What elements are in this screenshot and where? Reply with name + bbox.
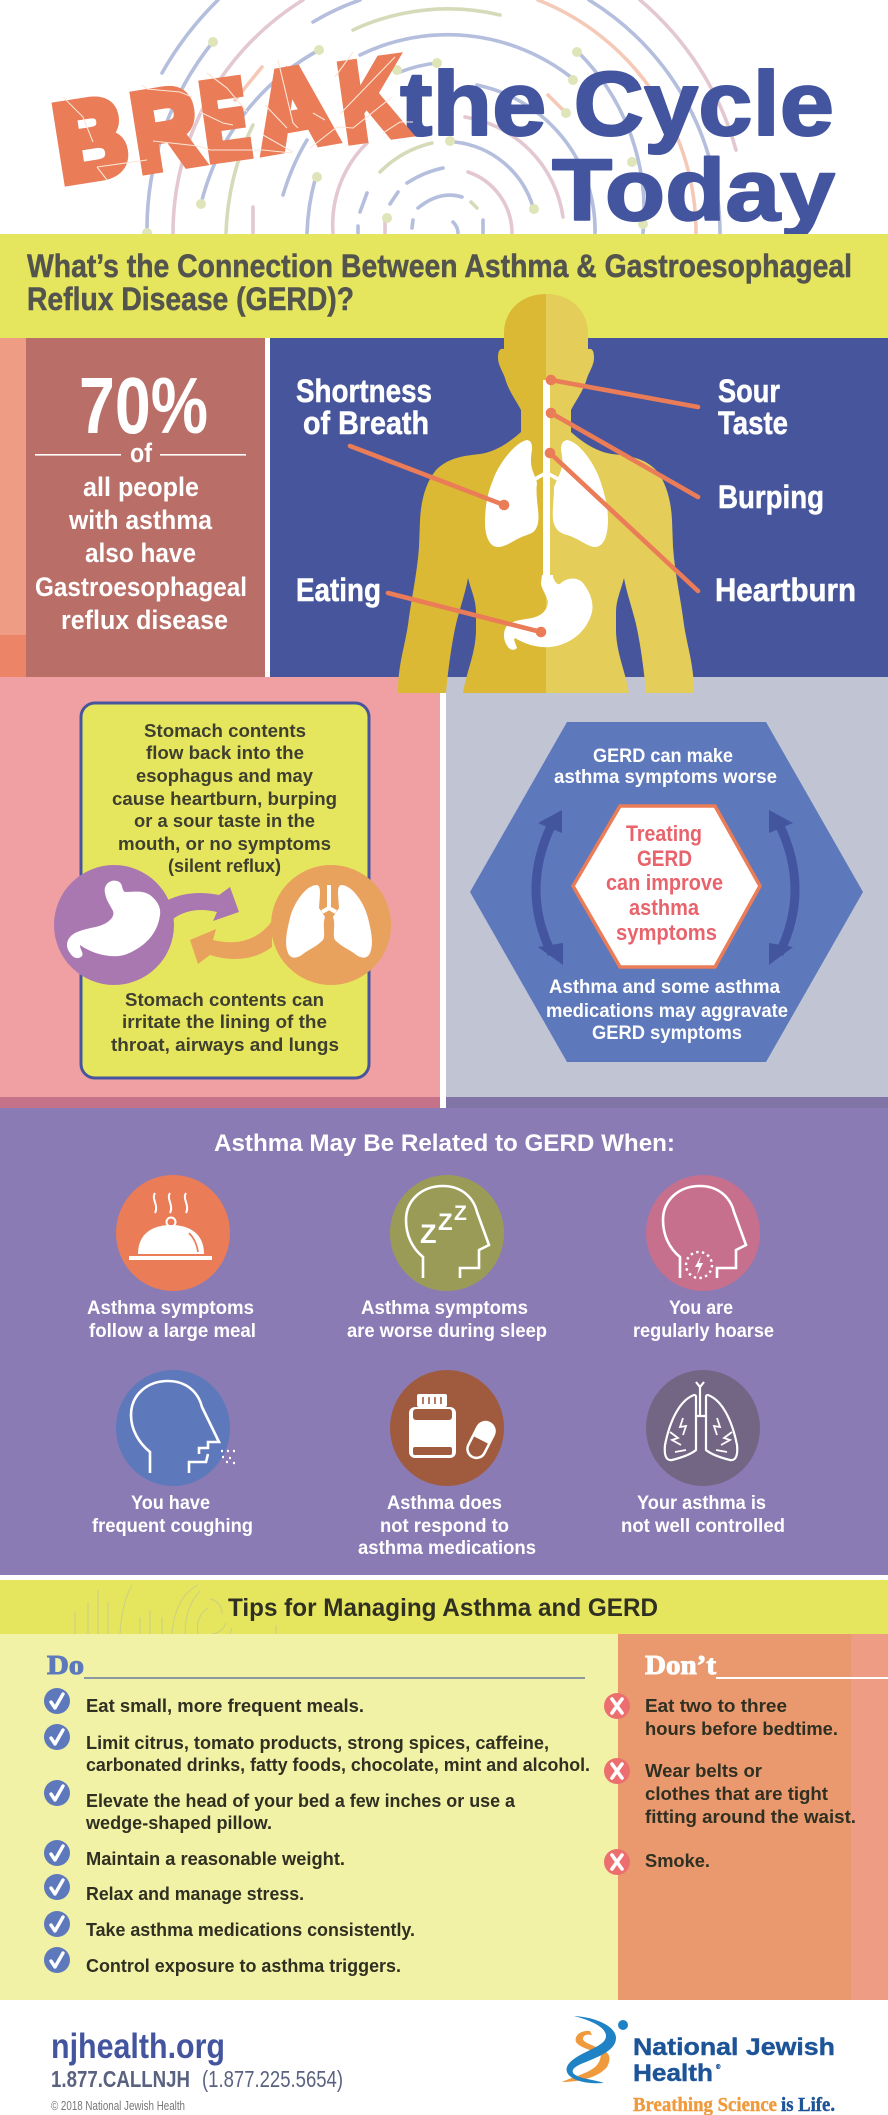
don't list text: Eat two to three bbox=[645, 1696, 787, 1716]
symptom labels: Sour bbox=[718, 373, 780, 409]
title: cracked word BREAK: K bbox=[332, 35, 411, 165]
text: GERD can make worse bbox=[554, 746, 777, 788]
panel: 70 percent statistic bbox=[0, 338, 265, 677]
caption: You are bbox=[669, 1298, 733, 1319]
fingerprint background pattern bbox=[147, 0, 736, 234]
check icons bbox=[44, 1688, 70, 1973]
caption: frequent coughing bbox=[92, 1516, 253, 1537]
title: cracked word BREAK bbox=[47, 35, 413, 206]
inner hexagon: treating GERD: GERD bbox=[637, 846, 692, 871]
icon: stomach bbox=[504, 575, 593, 650]
heading: do: Do bbox=[47, 1650, 84, 1680]
big number: 70% bbox=[79, 361, 208, 450]
heading: connection question: Reflux Disease (GERD)? bbox=[27, 281, 354, 317]
wordmark bbox=[633, 2034, 835, 2087]
symptom labels: Taste bbox=[718, 405, 788, 441]
text: stomach contents can irritate: irritate the lining of the bbox=[122, 1011, 327, 1032]
symptom labels: Shortness bbox=[296, 373, 432, 409]
panel: symptoms on blue bbox=[270, 338, 888, 677]
caption bbox=[621, 1493, 785, 1537]
panel: tips heading band bbox=[0, 1580, 888, 1634]
symptom labels: of Breath bbox=[303, 405, 429, 441]
title: the Cycle Today bbox=[400, 54, 835, 239]
footer contact: © 2018 National Jewish Health bbox=[51, 2099, 185, 2113]
don't list text: hours before bedtime. bbox=[645, 1719, 838, 1739]
logo: National Jewish Health bbox=[562, 2016, 835, 2115]
icon: hoarse head bbox=[646, 1175, 760, 1291]
callout: eating bbox=[388, 593, 544, 635]
callout lines with dots bbox=[350, 377, 698, 635]
panel: grey hexagon background bbox=[446, 677, 888, 1108]
footer contact: 1.877.CALLNJH bbox=[51, 2066, 190, 2092]
arrow: right double-headed bbox=[769, 810, 795, 965]
icon: meal cloche bbox=[116, 1175, 230, 1291]
text: stomach contents flow back: Stomach contents bbox=[144, 720, 306, 741]
caption bbox=[87, 1298, 256, 1342]
text: GERD can make worse: asthma symptoms worse bbox=[554, 767, 777, 788]
caption: Asthma does bbox=[387, 1493, 502, 1514]
icon: purple stomach circle bbox=[54, 865, 174, 985]
footer contact: njhealth.org bbox=[51, 2027, 225, 2066]
don't list text bbox=[645, 1696, 856, 1871]
inner hexagon: treating GERD: Treating bbox=[626, 821, 702, 846]
don't list text: clothes that are tight bbox=[645, 1784, 828, 1804]
arrow: left double-headed bbox=[536, 810, 563, 965]
panel: asthma may be related bbox=[0, 1108, 888, 1575]
text: asthma may aggravate GERD: GERD symptoms bbox=[592, 1023, 742, 1044]
symptom labels bbox=[296, 373, 856, 608]
don't list text: fitting around the waist. bbox=[645, 1807, 856, 1827]
callout: heartburn bbox=[547, 450, 698, 591]
panel: blue hexagon bbox=[470, 722, 863, 1062]
wordmark: National Jewish bbox=[633, 2034, 835, 2061]
wordmark: ® bbox=[716, 2064, 721, 2071]
do list text bbox=[85, 1696, 590, 1976]
caption: Asthma symptoms bbox=[87, 1298, 254, 1319]
panel: do list bbox=[0, 1634, 618, 2000]
do list text: Take asthma medications consistently. bbox=[86, 1920, 415, 1940]
do list text: Elevate the head of your bed a few inches or use a bbox=[86, 1791, 516, 1811]
caption bbox=[633, 1298, 774, 1342]
text: stomach contents flow back: flow back into the bbox=[146, 742, 304, 763]
statistic text: Gastroesophageal bbox=[35, 572, 247, 602]
do list text: Eat small, more frequent meals. bbox=[86, 1696, 364, 1716]
caption: not respond to bbox=[380, 1516, 509, 1537]
inner hexagon: treating GERD: asthma bbox=[629, 895, 700, 920]
don't list text: Smoke. bbox=[645, 1851, 710, 1871]
statistic text: with asthma bbox=[68, 505, 213, 535]
title: cracked word BREAK: E bbox=[194, 57, 256, 184]
arrow: purple to lungs bbox=[168, 887, 239, 921]
caption bbox=[92, 1493, 253, 1537]
panel: pink reflux bbox=[0, 677, 440, 1108]
caption: Your asthma is bbox=[637, 1493, 766, 1514]
statistic text: reflux disease bbox=[61, 605, 228, 635]
title: cracked word BREAK: A bbox=[246, 42, 342, 176]
do list text: Limit citrus, tomato products, strong spices, caffeine, bbox=[86, 1733, 549, 1753]
do list text: Relax and manage stress. bbox=[86, 1884, 304, 1904]
callout: shortness of breath bbox=[350, 446, 507, 508]
panel: connection heading band bbox=[0, 234, 888, 338]
inner hexagon: treating GERD bbox=[573, 806, 760, 967]
title: the Cycle Today: Today bbox=[552, 142, 835, 239]
text: stomach contents can irritate bbox=[111, 989, 339, 1055]
inner hexagon: treating GERD: can improve bbox=[606, 870, 723, 895]
title: cracked word BREAK: B bbox=[47, 74, 135, 206]
statistic text: also have bbox=[85, 538, 196, 568]
caption: regularly hoarse bbox=[633, 1321, 774, 1342]
do list text: wedge-shaped pillow. bbox=[85, 1813, 272, 1833]
icon: lungs and trachea bbox=[485, 380, 608, 577]
arrow: orange to stomach bbox=[190, 921, 272, 964]
text: stomach contents flow back: or a sour taste in the bbox=[134, 810, 315, 831]
text: stomach contents flow back: cause heartburn, burping bbox=[112, 788, 337, 809]
caption: Asthma symptoms bbox=[361, 1298, 528, 1319]
body figure with organs bbox=[398, 294, 694, 693]
title: cracked word BREAK: R bbox=[125, 64, 207, 195]
icon: sleeping head: Z bbox=[438, 1209, 453, 1236]
x icons bbox=[604, 1693, 630, 1875]
don't list text: Wear belts or bbox=[645, 1761, 762, 1781]
text: asthma may aggravate GERD: medications may aggravate bbox=[546, 1001, 788, 1022]
text: asthma may aggravate GERD: Asthma and some asthma bbox=[549, 977, 780, 998]
caption bbox=[358, 1493, 536, 1559]
icon: DNA ribbon bbox=[562, 2016, 628, 2083]
do list text: Control exposure to asthma triggers. bbox=[86, 1956, 401, 1976]
panel: yellow reflux explanation card bbox=[54, 703, 391, 1078]
heading: connection question bbox=[27, 248, 852, 317]
text: asthma may aggravate GERD bbox=[546, 977, 788, 1044]
title: the Cycle Today: the Cycle bbox=[400, 54, 834, 155]
heading: Asthma May Be Related to GERD When: bbox=[214, 1130, 675, 1157]
symptom labels: Eating bbox=[296, 572, 381, 608]
statistic text bbox=[35, 438, 247, 635]
statistic text: all people bbox=[83, 472, 199, 502]
icon: medicine bottle and pill bbox=[390, 1370, 504, 1486]
icon: irritated lungs bbox=[646, 1370, 760, 1486]
fingerprint dots bbox=[142, 37, 648, 238]
text: stomach contents flow back: mouth, or no symptoms bbox=[118, 833, 331, 854]
symptom labels: Heartburn bbox=[715, 572, 856, 608]
heading: Tips for Managing Asthma and GERD bbox=[228, 1594, 658, 1622]
do list text: Maintain a reasonable weight. bbox=[86, 1849, 345, 1869]
footer contact bbox=[51, 2027, 343, 2113]
symptom labels: Burping bbox=[718, 479, 824, 515]
do list text: carbonated drinks, fatty foods, chocolate, mint and alcohol. bbox=[86, 1755, 590, 1775]
icon: coughing head bbox=[116, 1370, 235, 1486]
text: stomach contents flow back: (silent reflux) bbox=[168, 855, 281, 876]
footer contact: (1.877.225.5654) bbox=[202, 2066, 343, 2092]
text: stomach contents flow back bbox=[112, 720, 337, 876]
callout: burping bbox=[548, 410, 698, 497]
caption bbox=[347, 1298, 547, 1342]
text: stomach contents can irritate: Stomach contents can bbox=[125, 989, 324, 1010]
wordmark: Health bbox=[633, 2060, 713, 2087]
icon: sleeping head bbox=[390, 1175, 504, 1291]
text: stomach contents can irritate: throat, airways and lungs bbox=[111, 1034, 339, 1055]
icon: orange lungs circle bbox=[271, 865, 391, 985]
text: stomach contents flow back: esophagus and may bbox=[136, 765, 314, 786]
caption: not well controlled bbox=[621, 1516, 785, 1537]
icon: sleeping head: Z bbox=[420, 1219, 436, 1249]
caption: follow a large meal bbox=[89, 1321, 256, 1342]
caption: You have bbox=[131, 1493, 210, 1514]
statistic text: of bbox=[130, 438, 153, 468]
callout: sour taste bbox=[548, 377, 698, 407]
panel: don't list bbox=[604, 1634, 888, 2000]
icon: sleeping head: Z bbox=[454, 1202, 467, 1225]
caption: asthma medications bbox=[358, 1538, 536, 1559]
heading: don't: Don’t bbox=[645, 1650, 716, 1680]
inner hexagon: treating GERD: symptoms bbox=[616, 920, 717, 945]
caption: are worse during sleep bbox=[347, 1321, 547, 1342]
text: GERD can make worse: GERD can make bbox=[593, 746, 733, 767]
